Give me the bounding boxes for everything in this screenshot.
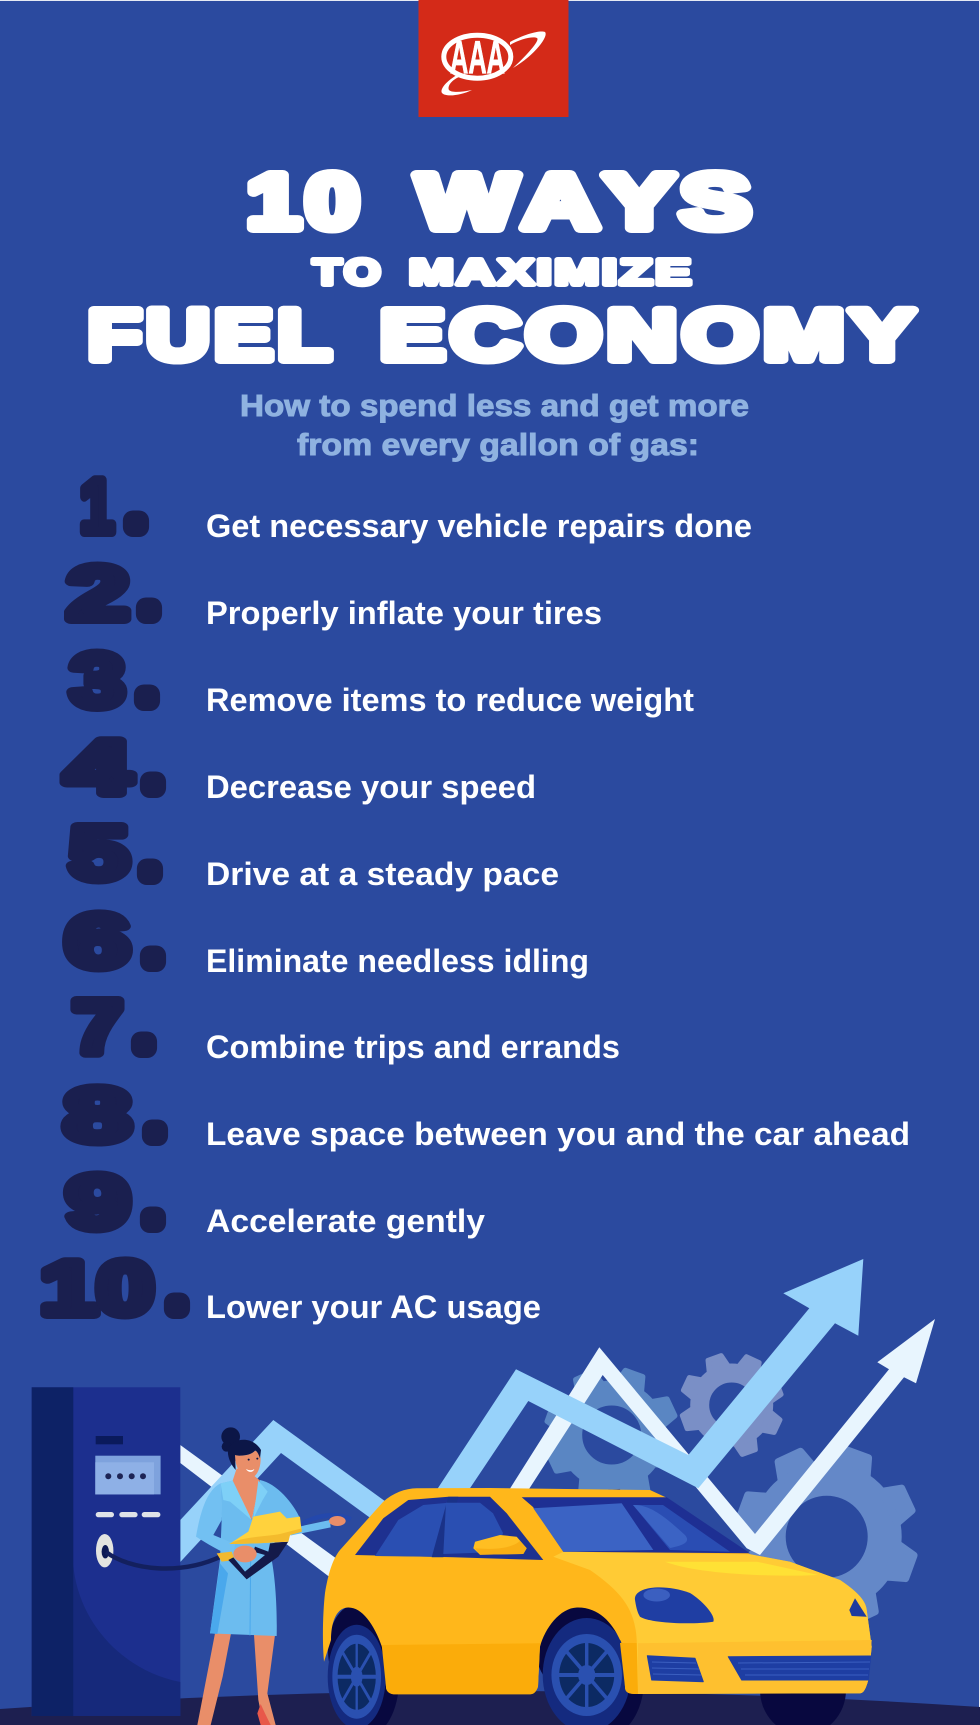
front lower band (638, 1640, 872, 1694)
title line: TO MAXIMIZE: TO (313, 252, 383, 292)
item 4: . (147, 749, 159, 798)
car body (323, 1488, 872, 1694)
coat (196, 1480, 300, 1636)
item 8: . (149, 1097, 161, 1146)
fog vent (647, 1656, 703, 1682)
numbered list (40, 464, 910, 1330)
item 4: Decrease your speed (206, 769, 536, 805)
front marker (849, 1598, 867, 1617)
item 4: 4 (66, 725, 131, 809)
item 1 (80, 464, 752, 548)
windshield (522, 1497, 750, 1553)
item 10: 10 (40, 1246, 154, 1330)
AAA logo: AAA (450, 31, 505, 83)
fuel hose (106, 1552, 222, 1568)
arrow: light blue trend line (180, 1259, 863, 1562)
fuel pump (32, 1387, 180, 1716)
front wheel (543, 1618, 631, 1725)
title line: 10 WAYS (247, 159, 756, 245)
item 1: Get necessary vehicle repairs done (206, 508, 752, 544)
side mirror (473, 1535, 527, 1555)
item 9: 9 (66, 1160, 130, 1244)
title line: FUEL ECONOMY (88, 296, 920, 376)
item 6: . (147, 923, 159, 972)
item 7: Combine trips and errands (206, 1029, 620, 1065)
subtitle: How to spend less and get more (240, 388, 749, 423)
headlight (635, 1587, 714, 1623)
item 6: 6 (66, 899, 130, 983)
item 2: Properly inflate your tires (206, 595, 602, 631)
item 10 (40, 1246, 541, 1330)
item 3 (70, 638, 694, 722)
grille (728, 1656, 871, 1680)
item 5 (70, 811, 559, 895)
item 7: 7 (72, 985, 122, 1069)
right arm and nozzle hose (290, 1515, 351, 1536)
gear: small top (681, 1355, 782, 1455)
body lower band (382, 1643, 638, 1694)
item 7: . (138, 1009, 150, 1058)
item 8: Leave space between you and the car ahead (206, 1116, 910, 1152)
subtitle: from every gallon of gas: (297, 427, 699, 462)
item 4 (66, 725, 536, 809)
item 2: 2 (68, 551, 128, 635)
item 8: 8 (64, 1073, 130, 1157)
item 3: . (141, 662, 153, 711)
item 10: Lower your AC usage (206, 1289, 541, 1325)
title line: TO MAXIMIZE (313, 252, 694, 292)
title (88, 159, 920, 376)
ground (0, 1691, 980, 1725)
car (323, 1488, 872, 1725)
chest and neck (233, 1468, 260, 1520)
collar (221, 1481, 268, 1520)
AAA logo (418, 0, 568, 117)
item 6 (66, 899, 589, 983)
item 7 (72, 985, 620, 1069)
title line: TO MAXIMIZE: MAXIMIZE (409, 252, 694, 292)
item 3: 3 (70, 638, 124, 722)
wheel shadows (328, 1605, 846, 1725)
hood highlight (665, 1562, 818, 1576)
fuel nozzle (217, 1512, 302, 1579)
item 2 (68, 551, 602, 635)
woman pumping fuel (196, 1427, 351, 1725)
item 10: . (171, 1270, 183, 1319)
item 3: Remove items to reduce weight (206, 682, 694, 718)
gear: large right (738, 1448, 915, 1625)
item 1: 1 (80, 464, 114, 548)
head (221, 1427, 261, 1477)
item 5: Drive at a steady pace (206, 856, 559, 892)
item 9: . (147, 1184, 159, 1233)
item 6: Eliminate needless idling (206, 943, 589, 979)
gear: middle (546, 1369, 677, 1501)
item 9 (66, 1160, 485, 1244)
pump screen (95, 1456, 161, 1494)
item 2: . (143, 575, 155, 624)
item 5: 5 (70, 811, 128, 895)
rear wheel (328, 1625, 386, 1725)
title line: 10 WAYS: WAYS (417, 159, 756, 245)
item 5: . (144, 836, 156, 885)
title line: FUEL ECONOMY: ECONOMY (380, 296, 920, 376)
arrow: white trend line (180, 1319, 935, 1650)
front fender and hood (553, 1552, 872, 1694)
title line: 10 WAYS: 10 (247, 159, 364, 245)
item 8 (64, 1073, 910, 1157)
title line: FUEL ECONOMY: FUEL (88, 296, 336, 376)
subtitle (240, 388, 749, 462)
legs (197, 1633, 276, 1725)
item 1: . (130, 488, 142, 537)
item 9: Accelerate gently (206, 1203, 485, 1239)
side windows (355, 1497, 543, 1560)
